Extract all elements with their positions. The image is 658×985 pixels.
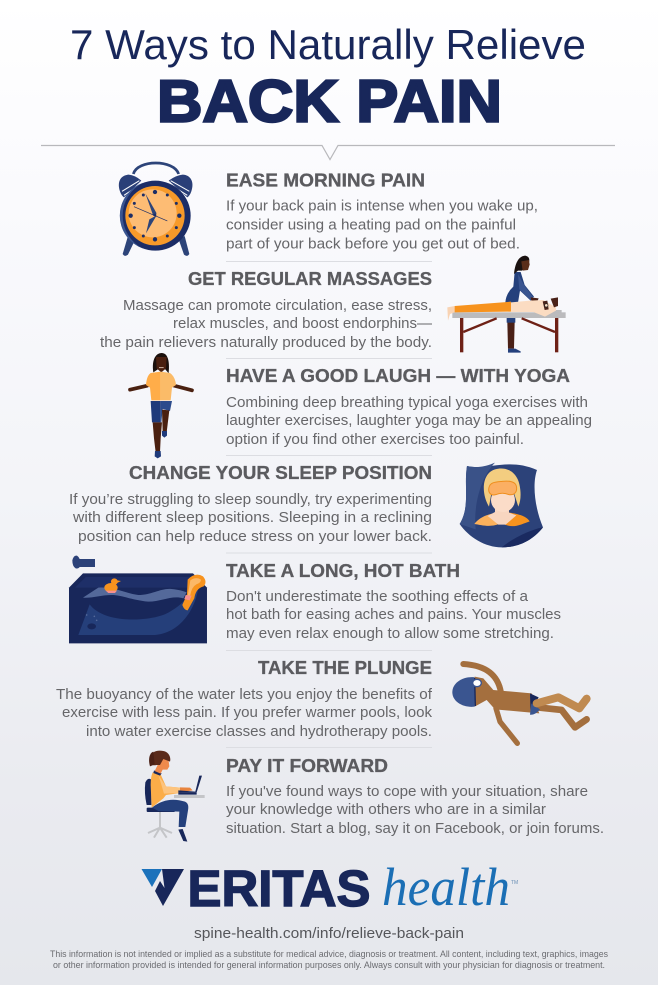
icon: alarm clock (119, 163, 193, 256)
body text (56, 687, 433, 740)
panel: take the plunge (56, 657, 587, 743)
body text: Massage can promote circulation, ease stress, (123, 298, 432, 314)
panel: laugh with yoga (130, 353, 592, 458)
heading: GET REGULAR MASSAGES (188, 268, 432, 289)
panel: sleep position (69, 462, 543, 547)
body text: Combining deep breathing typical yoga exercises with (226, 395, 588, 411)
body text (226, 784, 604, 837)
body text: Don't underestimate the soothing effects of a (226, 589, 528, 605)
body text (226, 589, 561, 642)
body text: may even relax enough to allow some stretching. (226, 626, 554, 642)
body text: into water exercise classes and hydrotherapy pools. (86, 724, 432, 740)
body text: position can help reduce stress on your lower back. (78, 529, 432, 545)
icon: woman working at laptop (145, 751, 205, 842)
body text: laughter exercises, laughter yoga may be an appealing (226, 413, 592, 429)
title: 7 Ways to Naturally Relieve (70, 21, 586, 68)
icon: bathtub with rubber duck (69, 556, 207, 643)
icon: woman with sleep mask on pillow (460, 463, 543, 547)
title: BACK PAIN (157, 68, 502, 134)
icon: woman balancing on one leg (130, 353, 192, 458)
body text: with different sleep positions. Sleeping in a reclining (72, 510, 432, 526)
panel: regular massages (100, 256, 566, 353)
body text: part of your back before you get out of bed. (226, 236, 520, 252)
heading: EASE MORNING PAIN (226, 170, 425, 190)
heading: HAVE A GOOD LAUGH — WITH YOGA (226, 365, 570, 386)
icon: swimmer (452, 664, 587, 743)
body text: the pain relievers naturally produced by the body. (100, 335, 432, 351)
title (70, 21, 586, 134)
heading: CHANGE YOUR SLEEP POSITION (129, 462, 432, 483)
body text: If your back pain is intense when you wake up, (226, 198, 538, 214)
disclaimer: or other information provided is intended for general information purposes only. Always consult with your physician for diagnosis or treatment. (53, 960, 605, 970)
logo: Veritas health: health (382, 857, 510, 917)
body text: The buoyancy of the water lets you enjoy the benefits of (56, 687, 433, 703)
body text: consider using a heating pad on the painful (226, 218, 516, 234)
panel: hot bath (69, 556, 561, 643)
panel: ease morning pain (119, 163, 538, 256)
body text: exercise with less pain. If you prefer warmer pools, look (62, 705, 433, 721)
body text (226, 198, 538, 252)
heading: TAKE A LONG, HOT BATH (226, 560, 460, 581)
body text (226, 395, 592, 448)
source url: spine-health.com/info/relieve-back-pain (194, 925, 464, 942)
logo: Veritas health: ERITAS (188, 860, 370, 917)
body text: If you've found ways to cope with your situation, share (226, 784, 588, 800)
logo: Veritas health (142, 857, 518, 917)
body text (69, 492, 432, 545)
disclaimer (50, 949, 608, 970)
icon: massage table (447, 256, 566, 353)
panel: pay it forward (145, 751, 604, 842)
heading: TAKE THE PLUNGE (258, 657, 432, 678)
heading: PAY IT FORWARD (226, 755, 388, 776)
body text: hot bath for easing aches and pains. Your muscles (226, 607, 561, 623)
logo: Veritas health: TM (511, 880, 518, 886)
body text: your knowledge with others who are in a similar (226, 802, 546, 818)
body text (100, 298, 433, 351)
body text: relax muscles, and boost endorphins— (173, 316, 433, 332)
body text: option if you find other exercises too painful. (226, 432, 524, 448)
body text: If you’re struggling to sleep soundly, try experimenting (69, 492, 432, 508)
disclaimer: This information is not intended or implied as a substitute for medical advice, diagnosis or treatment. All content, including text, graphics, images (50, 949, 608, 959)
body text: situation. Start a blog, say it on Facebook, or join forums. (226, 821, 604, 837)
